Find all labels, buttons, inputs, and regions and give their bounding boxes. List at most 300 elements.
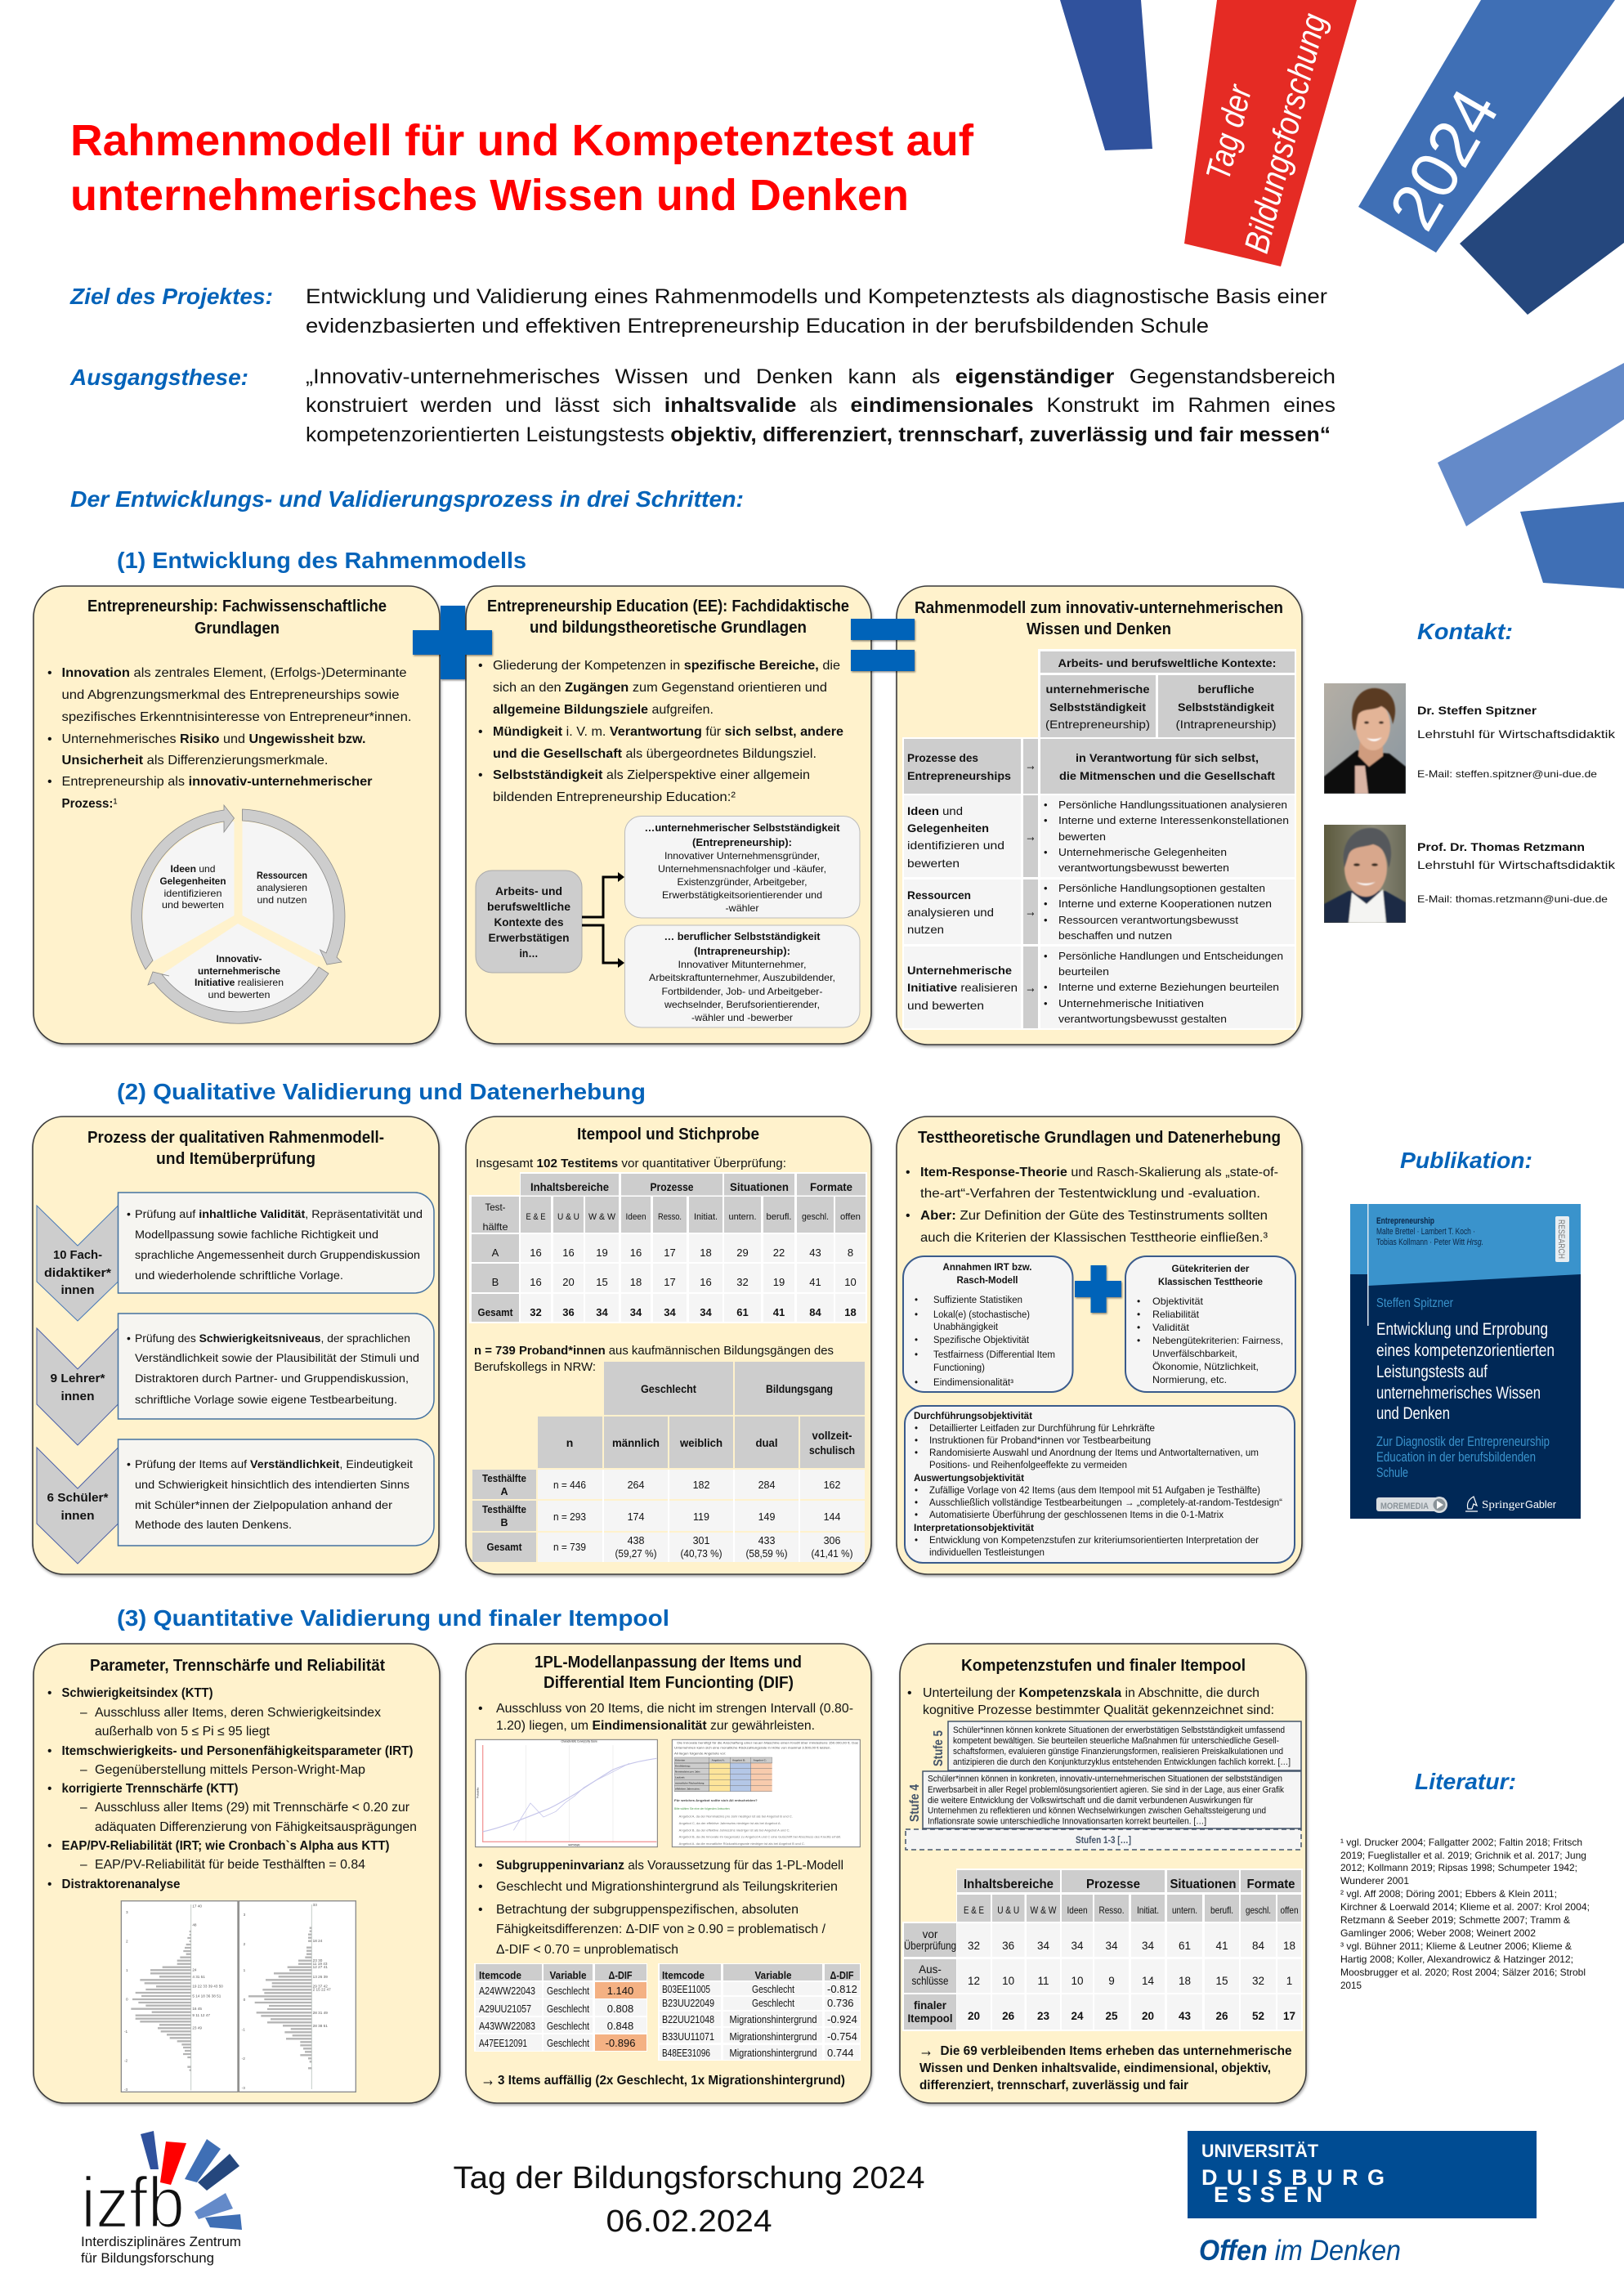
table: final item pool: 32 <box>1252 1975 1264 1987</box>
conclusion: DIF <box>481 2069 845 2091</box>
step 1: subject didactics experts: • <box>127 1207 131 1220</box>
panel heading: und Itemüberprüfung <box>156 1150 315 1168</box>
step 3: students: mit Schüler*innen der Zielpopulation anhand der <box>135 1498 392 1511</box>
references: Wunderer 2001 <box>1340 1875 1409 1886</box>
logo: University of Duisburg-Essen: DUISBURG <box>1201 2165 1385 2190</box>
table: item pool: 18 <box>630 1276 642 1288</box>
literature heading: Literatur: <box>1415 1769 1516 1794</box>
chart: Wright maps: 19 22 33 39 43 50 <box>192 1985 223 1989</box>
panel heading: Rahmenmodell zum innovativ-unternehmerischen <box>915 599 1283 617</box>
panel heading: Kompetenzstufen und finaler Itempool <box>961 1657 1246 1675</box>
arrows from context box <box>582 872 624 968</box>
references: 2019; Fueglistaller et al. 2019; Grichnik et al. 2017; Jung <box>1340 1850 1586 1861</box>
levels 1 to 3 <box>906 1829 1301 1850</box>
table: sample: 438 <box>628 1535 644 1546</box>
cycle diagram: und nutzen <box>257 894 307 906</box>
framework table: Interne und externe Kooperationen nutzen <box>1058 897 1272 910</box>
table: sample: dual <box>755 1436 778 1449</box>
chart: Wright maps: 13 26 39 <box>313 1975 328 1979</box>
table: final item pool: offen <box>1280 1904 1298 1916</box>
framework table: • <box>1044 846 1048 858</box>
chart: Wright maps: 2 <box>244 1942 246 1946</box>
table: sample: Bildungsgang <box>766 1382 833 1395</box>
table: final item pool: berufl. <box>1210 1904 1233 1916</box>
table: final item pool: 34 <box>1071 1940 1084 1952</box>
chart: characteristic curve: Latent Trait (logits) <box>568 1843 579 1846</box>
box: entrepreneurial self-employment: Erwerbstätigkeitsorientierender und <box>662 889 822 901</box>
book cover: Zur Diagnostik der Entrepreneurship <box>1376 1434 1550 1449</box>
references: Gamlinger 2006; Weber 2008; Weinert 2002 <box>1340 1927 1536 1939</box>
framework table: Interne und externe Interessenkonstellationen <box>1058 814 1289 826</box>
table: sample: 162 <box>824 1479 840 1491</box>
table: sample: 182 <box>693 1479 709 1491</box>
level 5: Schüler*innen können konkrete Situationen der erwerbstätigen Selbstständigkeit umfassend <box>953 1725 1285 1735</box>
bullet list: und Abgrenzungsmerkmal des Entrepreneurships sowie <box>62 688 400 702</box>
item pool intro: Insgesamt 102 Testitems vor quantitativer Überprüfung: <box>476 1156 786 1170</box>
framework table: • <box>1044 950 1048 962</box>
bullet list: Item-Response-Theorie und Rasch-Skalierung als „state-of- <box>920 1166 1278 1179</box>
bullet list: Aber: Zur Definition der Güte des Testinstruments sollten <box>920 1209 1268 1223</box>
contact text: Thomas Retzmann <box>1417 840 1616 905</box>
chart: Wright maps: 0 <box>244 1998 246 2002</box>
table: sample: (40,73 %) <box>680 1548 723 1560</box>
cycle diagram: unternehmerische <box>198 965 280 977</box>
chart: Wright maps <box>121 1901 356 2092</box>
box: objectivity: Auswertungsobjektivität <box>914 1474 1024 1484</box>
framework table: • <box>1044 799 1048 811</box>
book cover: Tobias Kollmann · Peter Witt Hrsg. <box>1376 1238 1483 1247</box>
sample intro: Berufskollegs in NRW: <box>474 1360 596 1374</box>
bullet list <box>906 1166 1278 1245</box>
panel heading: Itempool und Stichprobe <box>577 1126 759 1144</box>
project goal: evidenzbasierten und effektiven Entrepreneurship Education in der berufsbildenden Schule <box>306 315 1209 338</box>
level 5: Stufe 5 <box>932 1730 946 1766</box>
framework table: → <box>1025 979 1036 996</box>
bullet: item exclusion: • <box>478 1702 483 1716</box>
table: item pool: untern. <box>729 1212 757 1222</box>
table: item pool: 36 <box>562 1306 575 1318</box>
box: quality criteria: • <box>1137 1296 1140 1307</box>
box: objectivity: Entwicklung von Kompetenzstufen zur kriteriumsorientierten Interpretation der <box>929 1536 1259 1546</box>
framework table: identifizieren und <box>907 839 1004 852</box>
decorative header banner shapes: Tag der <box>1198 80 1259 184</box>
table: item pool: Formate <box>810 1180 852 1193</box>
box: objectivity: Automatisierte Überführung der geschlossenen Items in die 0-1-Matrix <box>929 1511 1224 1520</box>
step 3: students: 6 Schüler* <box>47 1491 109 1505</box>
chart: Wright maps: 16 45 <box>192 2007 202 2011</box>
box: quality criteria: • <box>1137 1335 1140 1346</box>
project goal <box>69 284 1327 338</box>
chart: characteristic curve: Characteristic Curve(s) By Score <box>561 1740 597 1743</box>
table: sample: n = 446 <box>553 1479 586 1491</box>
panel heading: Prozess der qualitativen Rahmenmodell- <box>87 1129 384 1147</box>
panel heading: Testtheoretische Grundlagen und Datenerhebung <box>918 1129 1281 1147</box>
section heading 3: (3) Quantitative Validierung und finaler Itempool <box>117 1605 669 1631</box>
table: item pool: 17 <box>664 1276 676 1288</box>
table: DIF left: Geschlecht <box>547 2003 589 2015</box>
table: final item pool: 11 <box>1037 1975 1049 1987</box>
table: DIF left: A24WW22043 <box>479 1985 535 1997</box>
table: item pool: 18 <box>844 1306 857 1318</box>
cycle diagram <box>132 805 345 1023</box>
panel: model fit and DIF <box>466 1644 871 2103</box>
table: sample: vollzeit- <box>812 1429 852 1442</box>
chart: Wright maps: 3 <box>244 1913 246 1917</box>
bullet list: • <box>47 1878 51 1891</box>
table: sample: 174 <box>628 1511 644 1523</box>
framework table: Ideen und <box>907 804 963 817</box>
framework table: Ressourcen verantwortungsbewusst <box>1058 914 1238 926</box>
references: ² vgl. Aff 2008; Döring 2001; Ebbers & Klein 2011; <box>1340 1888 1557 1900</box>
framework table: → <box>1025 828 1036 844</box>
table: final item pool: Überprüfung <box>904 1940 956 1952</box>
table: DIF left: Δ-DIF <box>608 1969 633 1981</box>
box: IRT assumptions: • <box>915 1310 918 1320</box>
panel heading: Entrepreneurship Education (EE): Fachdidaktische <box>487 597 849 615</box>
framework table: Persönliche Handlungssituationen analysieren <box>1058 799 1287 811</box>
bullet list: EAP/PV-Reliabilität für beide Testhälften = 0.84 <box>95 1858 365 1872</box>
table: item pool: Gesamt <box>477 1306 513 1318</box>
box: professional self-employment: Fortbildender, Job- und Arbeitgeber- <box>662 986 822 997</box>
cycle diagram: Gelegenheiten <box>160 875 226 887</box>
table: item pool: W & W <box>588 1212 616 1222</box>
image: sample test item: Laufzeit: <box>675 1776 685 1779</box>
step 2: teachers: innen <box>60 1390 95 1403</box>
table: final item pool: Inhaltsbereiche <box>964 1878 1054 1891</box>
panel heading <box>535 1654 802 1692</box>
bullet list: • <box>47 732 52 746</box>
chart: Wright maps: 3 <box>126 1910 128 1914</box>
box: quality criteria: Reliabilität <box>1152 1309 1200 1320</box>
table: final item pool: 10 <box>1002 1975 1014 1987</box>
contact text: Steffen Spitzner: Lehrstuhl für Wirtschaftsdidaktik <box>1417 727 1616 741</box>
contact heading: Kontakt: <box>1417 619 1513 644</box>
book cover: RESEARCH <box>1556 1220 1566 1259</box>
table: sample: weiblich <box>679 1436 723 1449</box>
box: IRT assumptions: Spezifische Objektivität <box>933 1336 1030 1345</box>
framework table: Unternehmerische <box>907 964 1012 977</box>
box: professional self-employment: wechselnder, Berufsorientierender, <box>664 999 820 1010</box>
table: final item pool: 43 <box>1179 2010 1191 2022</box>
chart: characteristic curve <box>476 1739 657 1847</box>
image: sample test item: Angebot A: <box>712 1759 725 1762</box>
image: sample test item: Kreditbetrag: <box>675 1765 691 1768</box>
table: final item pool: vor <box>923 1928 938 1940</box>
table: sample: 301 <box>693 1535 709 1546</box>
bullet list: – <box>80 1763 87 1777</box>
table: DIF right: Migrationshintergrund <box>729 2013 817 2025</box>
bullet list: spezifisches Erkenntnisinteresse von Entrepreneur*innen. <box>62 710 412 724</box>
table: final item pool: Resso. <box>1098 1904 1125 1916</box>
bullets: subgroup invariance: Betrachtung der subgruppenspezifischen, absoluten <box>496 1903 799 1917</box>
table: DIF left: Geschlecht <box>547 1985 589 1997</box>
bullets: subgroup invariance: Subgruppeninvarianz als Voraussetzung für das 1-PL-Modell <box>496 1859 843 1873</box>
panel heading: Entrepreneurship: Fachwissenschaftliche <box>87 597 387 615</box>
panel heading: Grundlagen <box>195 620 280 638</box>
box: professional self-employment <box>624 925 860 1027</box>
context box: berufsweltliche <box>487 900 570 913</box>
bullets: subgroup invariance <box>478 1859 843 1957</box>
panel: entrepreneurship education <box>466 586 871 1044</box>
table: sample: (58,59 %) <box>745 1548 788 1560</box>
table: item pool: Resso. <box>658 1212 682 1222</box>
chart: Wright maps: 1 <box>244 1968 246 1972</box>
framework table <box>902 649 1296 1030</box>
chart: Wright maps: -1 <box>124 2030 128 2034</box>
chart: Wright maps: 28 38 51 <box>313 2024 328 2028</box>
image: sample test item: Angebot C: <box>754 1759 767 1762</box>
table: final item pool: E & E <box>964 1904 984 1916</box>
book cover: unternehmerisches Wissen <box>1376 1384 1541 1403</box>
chart: Wright maps: 2 15 22 47 <box>313 1988 331 1992</box>
chart: Wright maps: -2 <box>124 2059 128 2063</box>
table: sample: 119 <box>693 1511 709 1523</box>
table: final item pool: 20 <box>968 2010 980 2022</box>
table: DIF right: B48EE31096 <box>662 2047 710 2059</box>
bullets: subgroup invariance: • <box>478 1903 483 1917</box>
box: objectivity: • <box>915 1424 918 1434</box>
box: quality criteria: Klassischen Testtheorie <box>1158 1276 1263 1287</box>
bullet list: Mündigkeit i. V. m. Verantwortung für sich selbst, andere <box>493 725 843 739</box>
step 1: subject didactics experts: Prüfung auf inhaltliche Validität, Repräsentativität und <box>135 1207 423 1220</box>
box: quality criteria: Validität <box>1152 1322 1190 1333</box>
title: Rahmenmodell für und Kompetenztest auf <box>70 116 974 165</box>
framework table: beurteilen <box>1058 965 1109 978</box>
framework table: Ressourcen <box>907 888 971 902</box>
chart: Wright maps: 0 <box>126 1998 128 2002</box>
chart: Wright maps: -1 <box>242 2027 245 2031</box>
box: IRT assumptions: • <box>915 1336 918 1345</box>
step 1: subject didactics experts <box>37 1193 434 1321</box>
table: item pool: 19 <box>773 1276 785 1288</box>
table: sample <box>472 1362 865 1562</box>
table: final item pool: 34 <box>1142 1940 1154 1952</box>
table: sample: 433 <box>758 1535 775 1546</box>
box: professional self-employment: (Intrapreneurship): <box>694 945 790 957</box>
table: final item pool: 52 <box>1252 2010 1264 2022</box>
book cover: eines kompetenzorientierten <box>1376 1341 1555 1360</box>
box: professional self-employment: … beruflicher Selbstständigkeit <box>664 930 821 942</box>
table: DIF left: Geschlecht <box>547 2037 589 2049</box>
chart: Wright maps: 5 14 18 36 38 51 <box>192 1994 221 1998</box>
bullet list: • <box>906 1166 910 1179</box>
table: final item pool <box>902 1869 1303 2031</box>
table: DIF right: Δ-DIF <box>830 1969 854 1981</box>
framework table: (Entrepreneurship) <box>1045 718 1150 731</box>
table: final item pool: 20 <box>1142 2010 1154 2022</box>
initial hypothesis: konstruiert werden und lässt sich inhaltsvalide als eindimensionales Konstrukt im Rahmen eines <box>306 394 1335 417</box>
box: entrepreneurial self-employment: -wähler <box>726 902 758 914</box>
table: item pool: geschl. <box>802 1212 829 1222</box>
logo: izfb: izfb <box>81 2162 185 2243</box>
framework table: nutzen <box>907 923 944 936</box>
level 5 <box>932 1721 1301 1770</box>
bullet list: Gliederung der Kompetenzen in spezifische Bereiche, die <box>493 659 840 673</box>
contact text: Steffen Spitzner: Dr. Steffen Spitzner <box>1417 704 1537 717</box>
table: item pool: berufl. <box>767 1212 791 1222</box>
chart: Wright maps: 24 <box>192 1968 197 1972</box>
context box: Erwerbstätigen <box>489 931 569 944</box>
table: final item pool: geschl. <box>1246 1904 1271 1916</box>
image: sample test item: Angebot A, da der Nominalzins pro Jahr niedriger ist als bei Angebot B und C. <box>679 1815 793 1819</box>
table: final item pool: 14 <box>1142 1975 1154 1987</box>
bullet list: Unsicherheit als Differenzierungsmerkmale. <box>62 754 329 768</box>
framework table: beschaffen und nutzen <box>1058 929 1172 942</box>
table: final item pool: Itempool <box>907 2012 953 2025</box>
table: item pool: U & U <box>557 1212 579 1222</box>
chart: Wright maps: 48 <box>192 1923 197 1927</box>
table: item pool: 20 <box>562 1276 575 1288</box>
image: sample test item: Angebot C, da der effektive Jahreszins niedriger ist als bei Angebot A. <box>679 1822 781 1825</box>
bullet list: the-art“-Verfahren der Testentwicklung und -evaluation. <box>920 1187 1260 1201</box>
box: IRT assumptions <box>903 1256 1072 1392</box>
chart: Wright maps: 23 49 <box>192 2026 202 2030</box>
cycle diagram: Ideen und <box>170 863 216 875</box>
box: objectivity: Positions- und Reihenfolgeeffekte zu vermeiden <box>929 1461 1127 1470</box>
step 2: teachers: • <box>127 1332 131 1345</box>
bullet list: • <box>47 1686 51 1700</box>
level 4: Unternehmen zu reflektieren und können Wechselwirkungen zwischen Gehaltssteigerung und <box>928 1806 1266 1816</box>
table: sample: (59,27 %) <box>615 1548 657 1560</box>
bullet list: Entrepreneurship als innovativ-unternehmerischer <box>62 775 373 789</box>
contact text: Thomas Retzmann: E-Mail: thomas.retzmann@uni-due.de <box>1417 893 1608 905</box>
level 5: schaftsformen, evaluieren günstige Finanzierungsformen, realisieren Preiskalkulationen und <box>953 1747 1283 1757</box>
conclusion: final item pool: Wissen und Denken inhaltsvalide, eindimensional, objektiv, <box>919 2061 1271 2075</box>
box: IRT assumptions: • <box>915 1378 918 1388</box>
bullet list: – <box>80 1858 87 1872</box>
framework table: • <box>1044 882 1048 894</box>
box: quality criteria <box>1125 1256 1295 1392</box>
bullet: competence scale <box>907 1686 1274 1717</box>
chart: Wright maps: 9 11 12 47 <box>192 2013 210 2017</box>
chart: characteristic curve: Probability <box>476 1787 479 1798</box>
bullet list: Distraktorenanalyse <box>62 1878 181 1891</box>
table: sample: B <box>500 1517 508 1528</box>
step 1: subject didactics experts: sprachliche Angemessenheit durch Gruppendiskussion <box>135 1248 420 1261</box>
table: item pool: 15 <box>596 1276 608 1288</box>
bullet list: • <box>47 1839 51 1853</box>
framework table: • <box>1044 814 1048 826</box>
step 3: students: Methode des lauten Denkens. <box>135 1518 292 1531</box>
table: DIF left: 0.848 <box>607 2020 633 2032</box>
project goal: Entwicklung und Validierung eines Rahmenmodells und Kompetenztests als diagnostische Basis einer <box>306 285 1327 308</box>
chart: Wright maps: 1 <box>126 1968 128 1972</box>
step 1: subject didactics experts: didaktiker* <box>44 1266 111 1280</box>
cycle diagram: und bewerten <box>208 989 270 1000</box>
context box: Kontexte des <box>494 915 564 929</box>
box: objectivity: • <box>915 1436 918 1446</box>
chart: Wright maps: 12 27 41 <box>313 1965 328 1969</box>
table: DIF right: B22UU21048 <box>662 2013 714 2025</box>
image: sample test item: Die Innovate benötigt für die Anschaffung einer neuen Maschine einen Kredit über mindestens 150.000,00 €. Das <box>677 1742 858 1745</box>
bullets: subgroup invariance: • <box>478 1859 483 1873</box>
logo: izfb <box>81 2131 242 2266</box>
initial hypothesis <box>69 365 1335 446</box>
image: sample test item: Unternehmen kann sich eine monatliche Rückzahlungsrate in Höhe von maximal 3.500,00 € leisten. <box>674 1747 831 1750</box>
table: DIF right <box>658 1963 861 2061</box>
references: 2012; Kollmann 2019; Ripsas 1998; Schumpeter 1942; <box>1340 1862 1577 1873</box>
bullet list <box>478 659 843 804</box>
box: objectivity: Detaillierter Leitfaden zur Durchführung für Lehrkräfte <box>929 1424 1155 1434</box>
image: sample test item: Kriterien <box>675 1759 685 1762</box>
table: final item pool: 17 <box>1283 2010 1295 2022</box>
cycle diagram: analysieren <box>257 882 307 893</box>
table: DIF right: -0.924 <box>827 2013 857 2025</box>
level 5: antizipieren die durch den Konjunkturzyklus entstehenden Entwicklungen fachlich korrekt. […] <box>953 1757 1291 1767</box>
step 1: subject didactics experts: 10 Fach- <box>53 1248 102 1262</box>
framework table: Initiative realisieren <box>907 981 1018 994</box>
bullets: subgroup invariance: • <box>478 1880 483 1894</box>
panel: test theory <box>897 1117 1302 1574</box>
table: DIF right: -0.754 <box>827 2030 857 2043</box>
panel heading: Parameter, Trennschärfe und Reliabilität <box>90 1657 385 1675</box>
table: item pool: 8 <box>848 1246 853 1259</box>
framework table: • <box>1044 897 1048 910</box>
bullet list: • <box>478 768 483 782</box>
table: item pool: hälfte <box>482 1221 508 1233</box>
box: entrepreneurial self-employment: (Entrepreneurship): <box>692 836 792 848</box>
table: item pool: A <box>492 1246 499 1259</box>
chart: Wright maps: 17 40 <box>192 1904 202 1908</box>
framework table: unternehmerische <box>1046 683 1150 696</box>
bullet: item exclusion <box>478 1702 853 1733</box>
table: DIF right: B03EE11005 <box>662 1983 710 1995</box>
box: objectivity: Interpretationsobjektivität <box>914 1524 1034 1533</box>
framework table: • <box>1044 914 1048 926</box>
cycle diagram: identifizieren <box>163 888 222 899</box>
table: item pool: 16 <box>700 1276 712 1288</box>
table: final item pool: Situationen <box>1170 1878 1236 1891</box>
table: sample: Testhälfte <box>482 1504 526 1515</box>
bullet: item exclusion: 1.20) liegen, um Eindimensionalität zur gewährleisten. <box>496 1719 815 1733</box>
bullet list: • <box>47 775 52 789</box>
chart: Wright maps: -3 <box>124 2088 128 2092</box>
table: sample: 306 <box>824 1535 840 1546</box>
level 4: Inflationsrate sowie unterschiedliche Innovationsarten korrekt beurteilen. […] <box>928 1816 1206 1826</box>
panel heading: Differential Item Funcionting (DIF) <box>544 1674 794 1692</box>
framework table: bewerten <box>1058 830 1106 843</box>
framework table: (Intrapreneurship) <box>1175 718 1277 731</box>
table: final item pool: 18 <box>1283 1940 1295 1952</box>
book cover: Leistungstests auf <box>1376 1363 1488 1381</box>
table: final item pool: Formate <box>1247 1878 1295 1891</box>
bullet list: • <box>906 1209 910 1223</box>
table: sample: n = 293 <box>553 1511 586 1523</box>
framework table: Interne und externe Beziehungen beurteilen <box>1058 981 1279 993</box>
box: objectivity: • <box>915 1448 918 1458</box>
table: DIF right: Migrationshintergrund <box>729 2047 817 2059</box>
logo: University of Duisburg-Essen: UNIVERSITÄT <box>1201 2141 1319 2161</box>
bullet: competence scale: Unterteilung der Kompetenzskala in Abschnitte, die durch <box>923 1686 1259 1700</box>
framework table: • <box>1044 997 1048 1009</box>
panel heading: 1PL-Modellanpassung der Items und <box>535 1654 802 1672</box>
references <box>1340 1837 1590 1991</box>
initial hypothesis: „Innovativ-unternehmerisches Wissen und Denken kann als eigenständiger Gegenstandsbereich <box>306 365 1335 388</box>
table: sample: Gesamt <box>487 1542 522 1553</box>
cycle diagram: Ressourcen <box>257 870 307 881</box>
icon: equals sign between panels <box>851 619 915 671</box>
book cover: Entwicklung und Erprobung <box>1376 1320 1548 1339</box>
table: DIF right: B23UU22049 <box>662 1997 714 2009</box>
box: entrepreneurial self-employment: Unternehmensnachfolger und -käufer, <box>658 863 826 875</box>
framework table: in Verantwortung für sich selbst, <box>1076 751 1259 764</box>
image: sample test item: Angebot B, da die Innovate im Gegensatz zu Angebot A und C eine Gutschrift bei Abschluss des Kredits erhält. <box>679 1836 841 1839</box>
box: objectivity: • <box>915 1498 918 1508</box>
table: final item pool: U & U <box>997 1904 1019 1916</box>
context box: in… <box>520 947 538 960</box>
table: item pool: 34 <box>664 1306 676 1318</box>
event footer: Tag der Bildungsforschung 2024 <box>453 2161 925 2195</box>
